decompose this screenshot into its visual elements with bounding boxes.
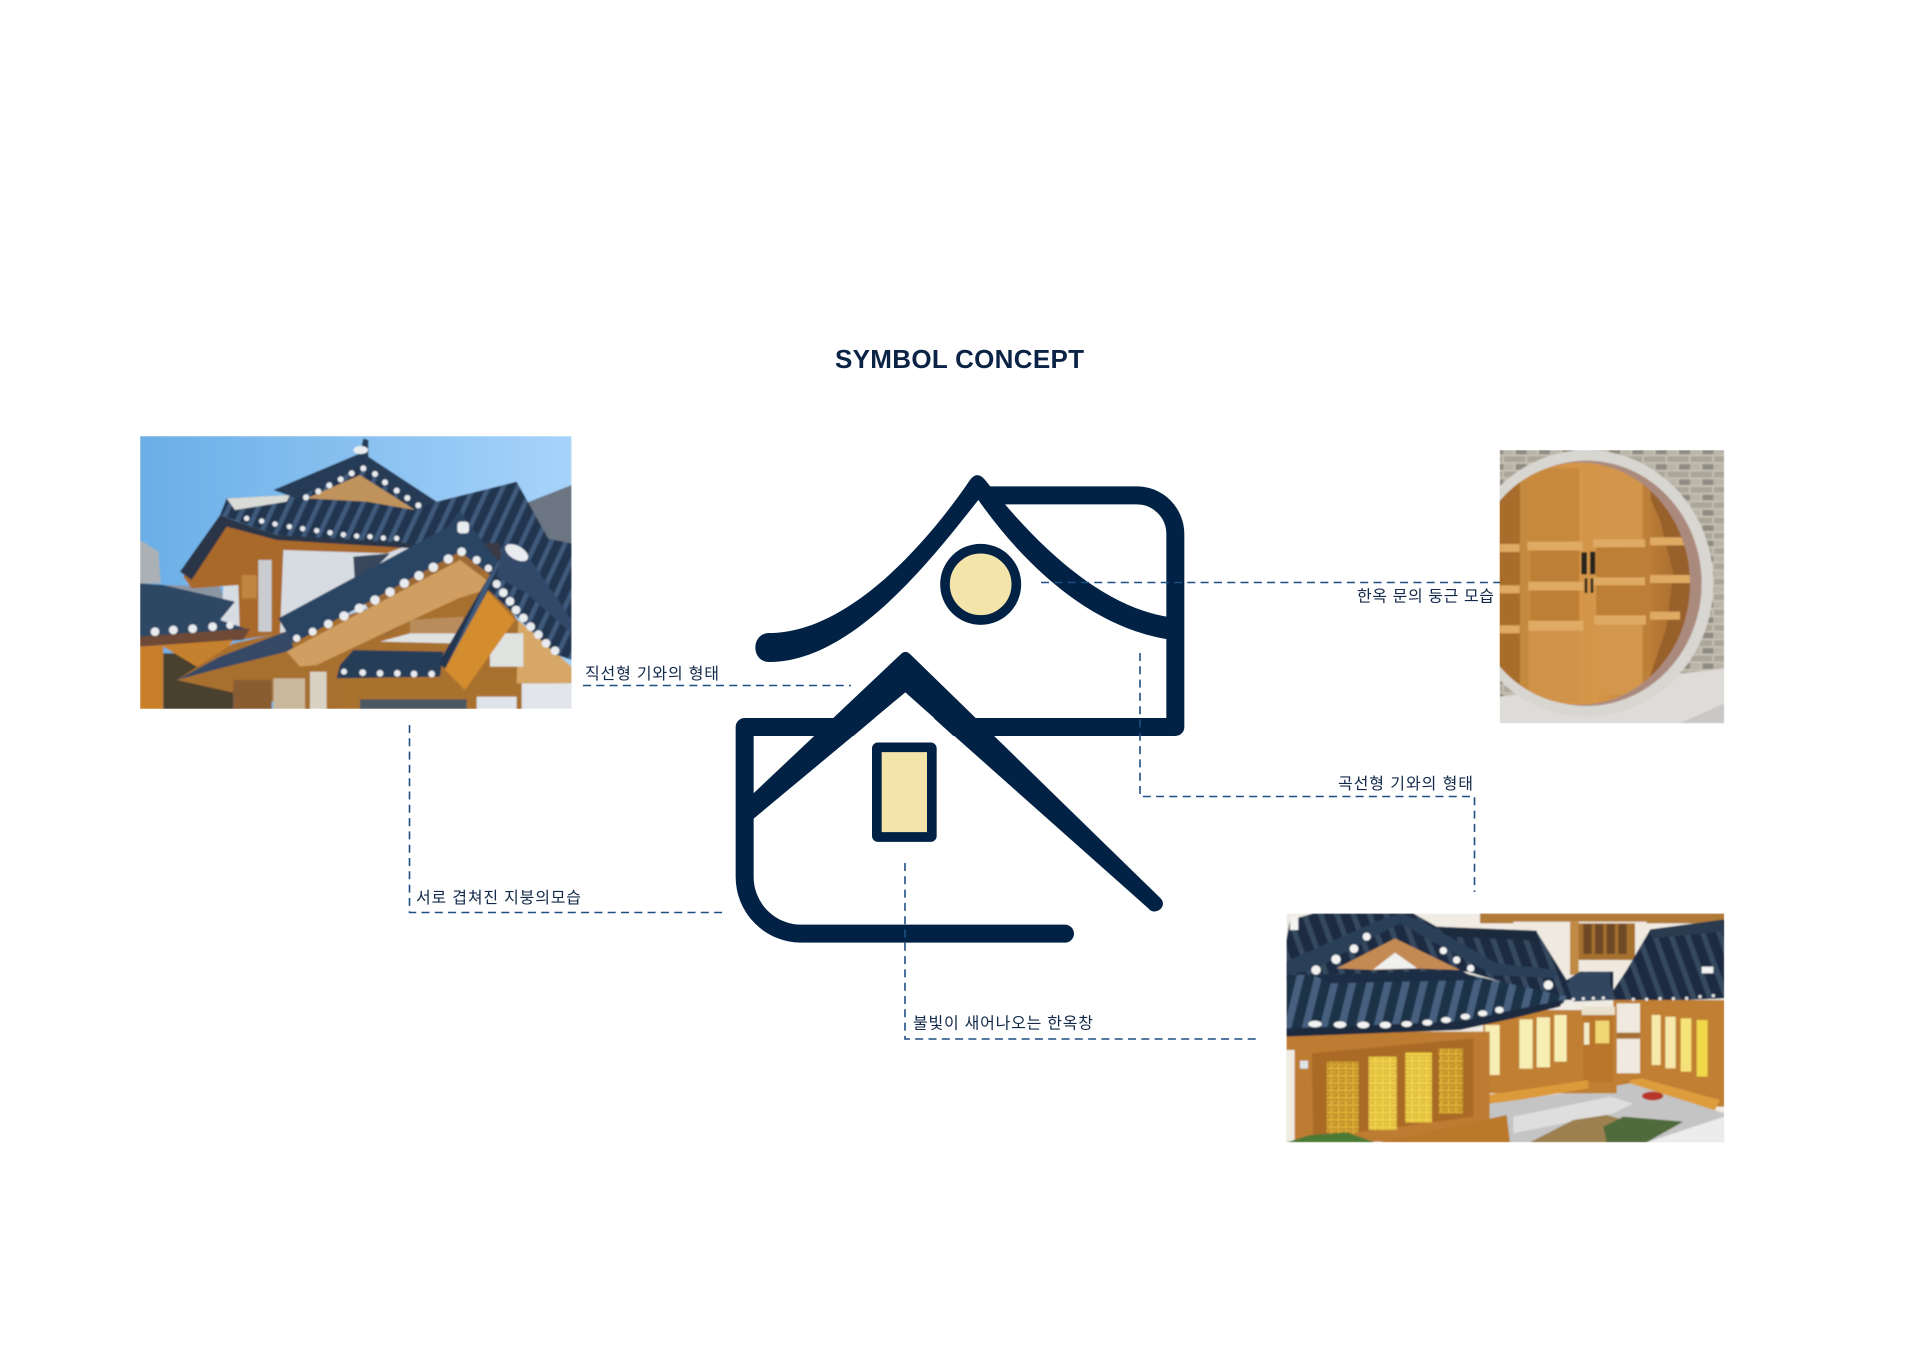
photo: overlapping hanok roofs	[140, 436, 572, 709]
title: SYMBOL CONCEPT	[835, 344, 1084, 374]
right bay	[1613, 1000, 1724, 1107]
callout: curved tile: 곡선형 기와의 형태	[1338, 775, 1473, 793]
front wing	[1286, 1032, 1490, 1142]
back wing	[1480, 913, 1724, 923]
callout: curved tile	[1140, 653, 1474, 892]
right roof	[1607, 920, 1724, 1002]
rectangular window	[877, 747, 932, 837]
callout: overlapping roofs	[410, 725, 727, 912]
callout: straight tile: 직선형 기와의 형태	[585, 665, 719, 683]
callout: glowing window: 불빛이 새어나오는 한옥창	[913, 1014, 1093, 1032]
white roof tile ends	[151, 446, 559, 677]
upper roof and white wall	[187, 547, 413, 640]
callout: glowing window	[905, 863, 1258, 1039]
lower small roof	[337, 650, 443, 678]
right front roof	[517, 620, 572, 683]
courtyard	[1487, 1083, 1724, 1142]
photo: hanok with glowing windows	[1286, 913, 1724, 1142]
left lower roof	[140, 583, 250, 640]
upper frame stroke	[745, 495, 1175, 934]
callout: round door: 한옥 문의 둥근 모습	[1357, 588, 1494, 606]
circle window	[945, 549, 1016, 620]
symbol logo	[745, 475, 1175, 934]
callout: overlapping roofs: 서로 겹쳐진 지붕의모습	[416, 889, 581, 907]
curved roof	[755, 475, 1168, 662]
white tile ends	[1290, 917, 1713, 1028]
photo: round hanok door	[1500, 450, 1724, 724]
straight roof	[745, 652, 1163, 911]
centre gable roof	[177, 570, 572, 709]
main roof	[1286, 913, 1613, 1000]
white interior of lower roof	[852, 692, 955, 737]
middle bay	[1483, 1010, 1617, 1093]
backing below upper roof	[413, 540, 572, 593]
